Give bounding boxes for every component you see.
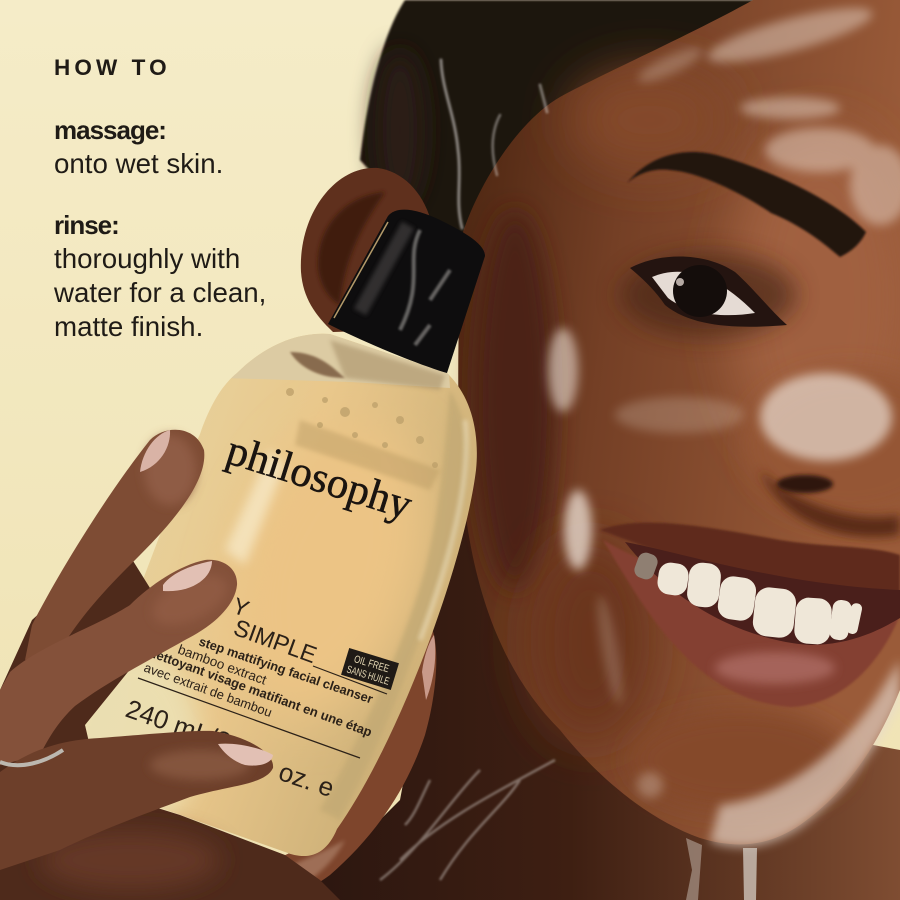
label rules	[138, 666, 387, 758]
hair	[360, 0, 770, 250]
fingernails	[140, 430, 170, 472]
eyebrow	[627, 152, 866, 257]
step: rinse: rinse:	[54, 210, 119, 240]
product bottle: oz. e	[275, 756, 338, 803]
brand name: philosophy	[221, 427, 418, 529]
product bottle: nettoyant visage matifiant en une étap	[147, 645, 374, 740]
mouth interior	[625, 542, 900, 645]
teeth	[632, 550, 863, 645]
ear	[301, 168, 432, 332]
warm centre	[270, 443, 434, 712]
middle finger	[0, 560, 237, 765]
lower lip	[603, 540, 900, 707]
bubbles	[286, 388, 438, 468]
oil free badge: OIL FREE	[352, 653, 390, 675]
clear shoulder	[232, 334, 450, 388]
mottled reflection band	[295, 420, 440, 490]
upper lip	[600, 523, 900, 592]
step: rinse: water for a clean,	[54, 277, 266, 308]
step: rinse: thoroughly with	[54, 243, 240, 274]
textured right edge	[320, 390, 469, 820]
wet thumb highlight	[240, 840, 345, 900]
thumb behind bottle	[215, 625, 436, 900]
little finger	[0, 731, 273, 870]
product bottle: avec extrait de bambou	[142, 660, 274, 720]
eye socket shadow	[620, 253, 796, 337]
bottle cap	[328, 210, 485, 373]
step: rinse	[54, 210, 266, 342]
palm	[0, 540, 340, 900]
step: massage	[54, 115, 223, 179]
oil free badge	[341, 648, 399, 690]
foam along jaw	[593, 594, 900, 847]
smile	[600, 523, 900, 707]
foam on forehead	[634, 0, 900, 225]
size: 240 mL/8	[122, 693, 234, 757]
nose	[745, 370, 900, 537]
step: massage: massage:	[54, 115, 166, 145]
how to heading: HOW TO	[54, 55, 171, 80]
water streaming along hairline	[441, 60, 547, 228]
oil free badge: SANS HUILE	[345, 664, 391, 688]
bottle body	[82, 334, 477, 856]
step: massage: onto wet skin.	[54, 148, 223, 179]
face	[458, 0, 900, 844]
index finger	[25, 430, 204, 660]
holding hand	[0, 430, 435, 900]
eye	[630, 256, 787, 327]
drips under chin	[686, 838, 757, 900]
product bottle	[125, 210, 485, 856]
water splash at lower neck	[380, 760, 555, 880]
product bottle: SIMPLE	[230, 614, 320, 668]
pale lower-left liquid	[85, 654, 207, 814]
ring	[0, 750, 63, 765]
product description: step mattifying facial cleanser	[197, 634, 375, 706]
product bottle: bamboo extract	[176, 642, 269, 688]
step: rinse: matte finish.	[54, 311, 203, 342]
foam on cheek	[548, 328, 745, 570]
label reflection highlight	[225, 450, 285, 565]
neck and shoulder	[300, 480, 900, 900]
product name: Y	[229, 592, 253, 622]
